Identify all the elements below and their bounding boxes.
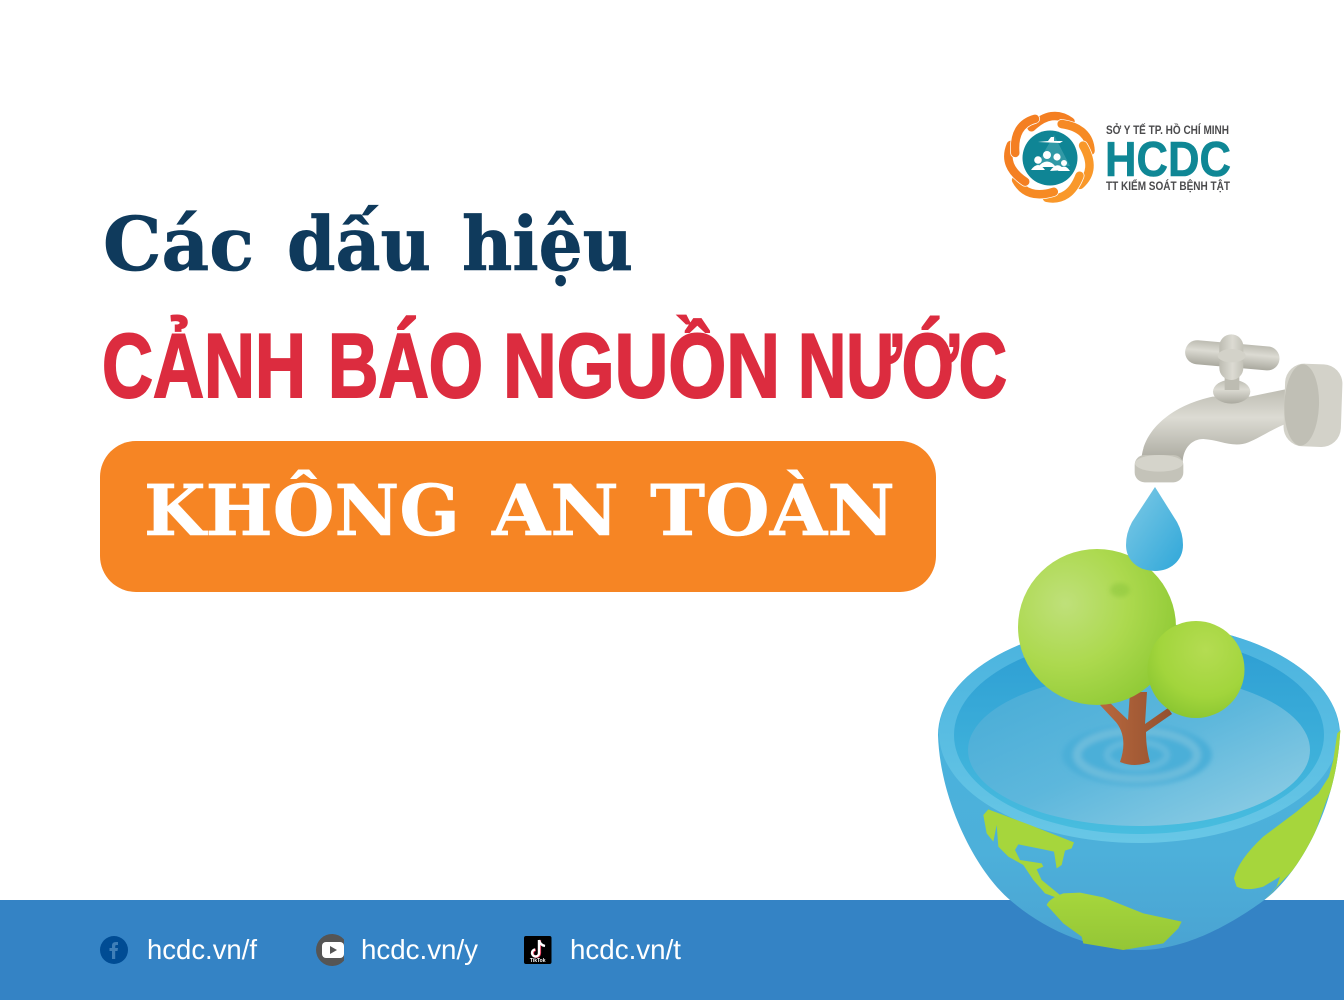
faucet stem: [1225, 375, 1239, 390]
icon: tiktok: TikTok: [530, 958, 546, 964]
faucet collar: [1213, 380, 1250, 404]
logo text: TT Kiểm soát bệnh tật: TT KIỂM SOÁT BỆNH TẬT: [1106, 178, 1231, 193]
bowl rim: [939, 623, 1339, 843]
footer link: facebook: hcdc.vn/f: [147, 934, 257, 965]
footer link: tiktok: hcdc.vn/t: [570, 934, 681, 965]
title line: CẢNH BÁO NGUỒN NƯỚC: CẢNH: [102, 315, 306, 417]
orange banner: KHÔNG AN TOÀN: TOÀN: [650, 469, 895, 552]
title line: CẢNH BÁO NGUỒN NƯỚC: NƯỚC: [798, 316, 1007, 417]
tree crown: small: [1148, 621, 1244, 718]
logo text: Sở Y tế: SỞ Y TẾ TP. HỒ CHÍ MINH: [1106, 122, 1229, 137]
title line: CẢNH BÁO NGUỒN NƯỚC: NGUỒN: [503, 315, 780, 417]
water ripples: [1062, 724, 1212, 786]
icon: facebook: [100, 936, 128, 964]
faucet spout: [1142, 388, 1298, 462]
water drop: [1126, 487, 1183, 571]
icon: tiktok: [524, 936, 552, 964]
footer link: facebook: [100, 934, 257, 965]
faucet nozzle: [1135, 455, 1183, 482]
footer link: tiktok: [524, 934, 681, 965]
logo emblem: [1005, 115, 1095, 203]
footer link: youtube: hcdc.vn/y: [361, 934, 478, 965]
orange banner: KHÔNG AN TOÀN: AN: [491, 469, 619, 552]
bowl body: [938, 623, 1340, 950]
water surface: [968, 674, 1310, 826]
title line: CẢNH BÁO NGUỒN NƯỚC: BÁO: [328, 316, 483, 417]
orange banner: KHÔNG AN TOÀN: KHÔNG: [144, 469, 460, 552]
faucet: [1135, 334, 1343, 482]
footer link: youtube: [316, 934, 478, 966]
faucet handle: [1184, 334, 1281, 380]
footer band: [0, 900, 1344, 1000]
orange banner: KHÔNG AN TOÀN: [100, 441, 936, 592]
faucet flange: [1283, 363, 1343, 448]
continent: left: [983, 809, 1074, 898]
continent: bottom: [1047, 893, 1182, 950]
bowl inner wall: [954, 636, 1324, 834]
icon: youtube: [316, 934, 344, 966]
tree crown: large: [1018, 549, 1176, 705]
title line: Các dấu hiệu: Các: [103, 202, 254, 288]
illustration: bowl globe with tree and faucet: [938, 334, 1343, 950]
title line: Các dấu hiệu: hiệu: [462, 202, 633, 288]
continent: right: [1234, 730, 1341, 902]
HCDC logo: [1005, 115, 1231, 203]
title line: Các dấu hiệu: dấu: [287, 202, 431, 288]
tree trunk and branches: [1100, 692, 1172, 765]
logo text: HCDC: HCDC: [1105, 133, 1231, 187]
